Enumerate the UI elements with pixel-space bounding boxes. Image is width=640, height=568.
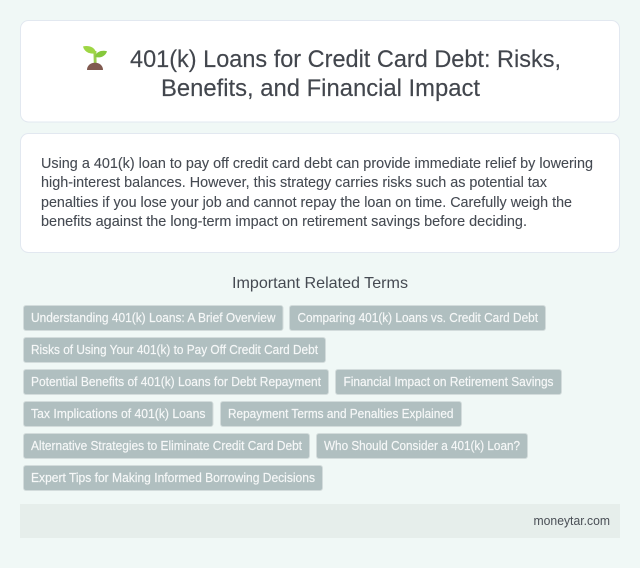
tag: financial impact: Financial Impact on Retirement Savings	[344, 375, 554, 389]
icon: seedling	[83, 46, 107, 70]
panel: summary card	[20, 134, 620, 252]
panel: title card	[20, 20, 620, 122]
tag: understanding: Understanding 401(k) Loans: A Brief Overview	[31, 311, 276, 325]
footer bar	[20, 504, 620, 538]
summary text	[41, 156, 593, 230]
tag: alternative strategies: Alternative Strategies to Eliminate Credit Card Debt	[31, 439, 302, 453]
tag: comparing	[290, 306, 546, 330]
summary text: benefits against the long-term impact on retirement savings before deciding.	[41, 214, 527, 230]
tag: repayment terms: Repayment Terms and Penalties Explained	[228, 407, 454, 421]
tag: risks: Risks of Using Your 401(k) to Pay Off Credit Card Debt	[31, 343, 318, 357]
title: 401(k) Loans for Credit Card Debt: Risks,	[130, 46, 561, 73]
heading: related terms: Important Related Terms	[232, 275, 408, 292]
tag: repayment terms	[220, 402, 462, 426]
tag: expert tips: Expert Tips for Making Informed Borrowing Decisions	[31, 471, 315, 485]
tag: alternative strategies	[24, 434, 310, 458]
tag: benefits: Potential Benefits of 401(k) Loans for Debt Repayment	[31, 375, 321, 389]
summary text: penalties if you lose your job and cannot repay the loan on time. Carefully weigh the	[41, 195, 572, 211]
footer source: moneytar.com	[534, 514, 610, 528]
tag: who should consider: Who Should Consider a 401(k) Loan?	[324, 439, 520, 453]
tag: tax implications	[24, 402, 213, 426]
summary text: Using a 401(k) loan to pay off credit card debt can provide immediate relief by lowering	[41, 156, 593, 172]
tag: risks	[24, 338, 326, 362]
summary text: high-interest balances. However, this strategy carries risks such as potential tax	[41, 175, 548, 191]
tag: comparing: Comparing 401(k) Loans vs. Credit Card Debt	[298, 311, 538, 325]
tag: understanding	[24, 306, 283, 330]
tag: tax implications: Tax Implications of 401(k) Loans	[31, 407, 206, 421]
tag: financial impact	[336, 370, 562, 394]
title: Benefits, and Financial Impact	[161, 75, 480, 102]
tag: who should consider	[316, 434, 528, 458]
title	[130, 46, 561, 102]
tag: expert tips	[24, 466, 322, 490]
tag list	[24, 306, 562, 490]
tag: benefits	[24, 370, 328, 394]
